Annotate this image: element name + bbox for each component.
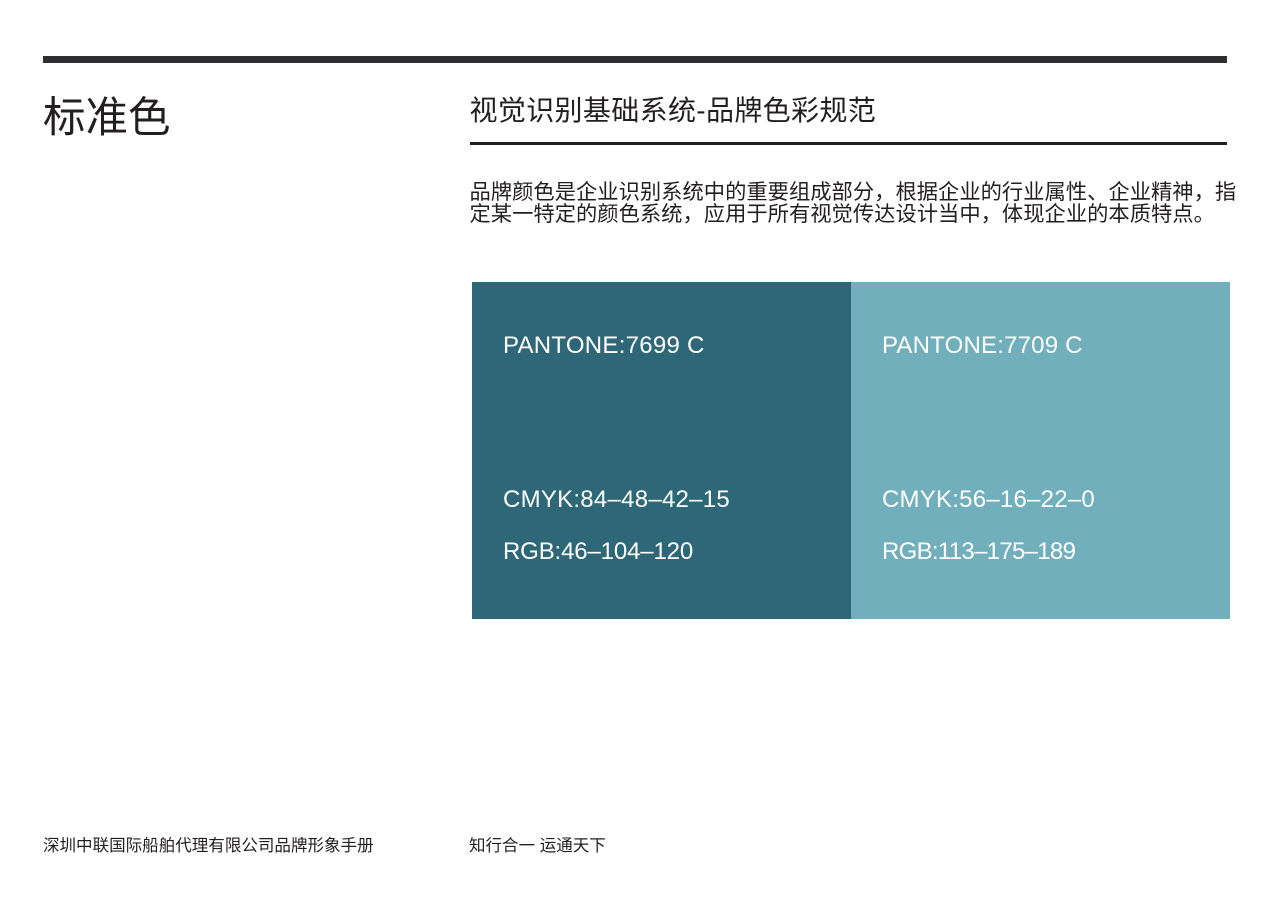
pantone label: PANTONE:7709 C [882, 332, 1083, 359]
footer company name: 深圳中联国际船舶代理有限公司品牌形象手册 [43, 836, 374, 855]
rgb label: RGB:113–175–189 [882, 538, 1075, 565]
description text: 定某一特定的颜色系统，应用于所有视觉传达设计当中，体现企业的本质特点。 [470, 202, 1215, 226]
title: 标准色 [43, 95, 171, 142]
description text [470, 180, 1236, 226]
footer slogan: 知行合一 运通天下 [469, 836, 606, 855]
description text: 品牌颜色是企业识别系统中的重要组成部分，根据企业的行业属性、企业精神，指 [470, 180, 1236, 204]
cmyk label: CMYK:84–48–42–15 [503, 486, 730, 513]
panel: primary colour swatch [472, 282, 851, 619]
cmyk label: CMYK:56–16–22–0 [882, 486, 1095, 513]
top rule [43, 56, 1227, 63]
rgb label: RGB:46–104–120 [503, 538, 693, 565]
pantone label: PANTONE:7699 C [503, 332, 705, 359]
panel: secondary colour swatch [851, 282, 1230, 619]
subtitle heading: 视觉识别基础系统-品牌色彩规范 [470, 95, 876, 126]
subtitle rule [470, 142, 1227, 145]
